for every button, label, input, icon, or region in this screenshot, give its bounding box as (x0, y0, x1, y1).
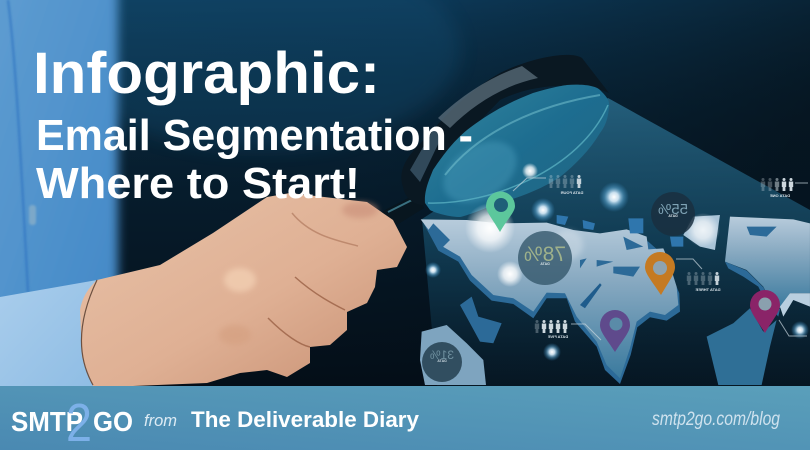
callout: data three people (687, 272, 721, 292)
pin: orange (645, 252, 675, 295)
data circle 31%: 31% (430, 348, 454, 362)
callout: data four people: DATA FOUR (560, 190, 583, 195)
data circle 78%: DATA (540, 262, 550, 266)
data circle 55%: 55% (658, 201, 688, 218)
data circle 78%: 78% (524, 243, 566, 266)
location pins (486, 192, 780, 352)
handle (343, 193, 424, 260)
text: blog url: smtp2go.com/blog (652, 409, 780, 430)
logo: SMTP2GO: GO (93, 406, 133, 437)
data circle 31% (422, 342, 462, 382)
title (33, 41, 473, 208)
footer bar (0, 386, 810, 450)
callout: data five people: DATA FIVE (547, 334, 568, 339)
map: North America surface (725, 217, 810, 308)
lens frame (401, 55, 609, 205)
heading: Email Segmentation: Email Segmentation - (36, 111, 473, 160)
map: Greenland block (683, 215, 720, 250)
data circle 55% (651, 192, 695, 236)
data circle 78% (518, 231, 572, 285)
pin: purple (600, 310, 630, 352)
map: Australia shape (420, 325, 486, 385)
callout: data one people (761, 178, 793, 198)
shirt and torso (0, 0, 118, 420)
text: The Deliverable Diary: The Deliverable Diary (191, 407, 420, 432)
callout: data four people (549, 175, 583, 195)
pin: magenta (750, 290, 780, 333)
callout: data one people: DATA ONE (770, 193, 790, 198)
data circle 31%: DATA (437, 359, 447, 363)
map: Eurasia extrusion (424, 224, 680, 384)
pin: green (486, 192, 515, 232)
glowing light spots (425, 163, 809, 361)
magnifying glass (343, 55, 609, 260)
callout connector lines (513, 178, 808, 340)
logo: SMTP2GO: SMTP (11, 406, 83, 437)
world map (420, 215, 810, 385)
shirt cuff (0, 280, 97, 386)
callout: data five people (535, 320, 568, 339)
map: South America (707, 308, 777, 385)
heading: Infographic: Infographic: (33, 41, 380, 106)
data circle 55%: DATA (668, 214, 678, 218)
logo: SMTP2GO (11, 393, 133, 450)
callout: data three people: DATA THREE (695, 287, 721, 292)
text: from: from (144, 411, 177, 430)
lens (425, 85, 609, 217)
heading: Where to Start: Where to Start! (36, 159, 360, 208)
beam of light from lens (422, 98, 810, 386)
hand (80, 193, 407, 386)
map: Eurasia surface (421, 219, 678, 378)
small map fragments (557, 215, 683, 247)
